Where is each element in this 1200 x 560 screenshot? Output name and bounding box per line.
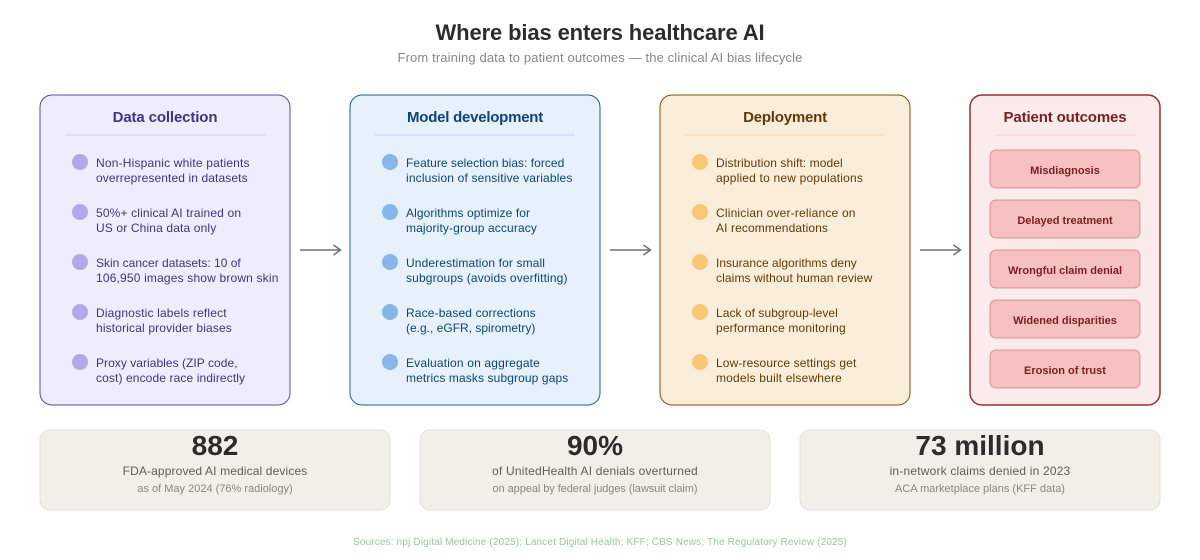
stat card: 73 million: in-network claims denied in 2023 bbox=[890, 464, 1070, 478]
heading: patient outcomes: Patient outcomes bbox=[1004, 109, 1126, 126]
item: lack of monitoring bbox=[692, 304, 846, 335]
item: proxy variables: cost) encode race indirectly bbox=[96, 371, 245, 385]
item: underestimation: Underestimation for small bbox=[406, 256, 545, 270]
stat card: 882 bbox=[40, 430, 390, 510]
item: distribution shift: Distribution shift: model bbox=[716, 156, 843, 170]
item: clinician over-reliance: AI recommendations bbox=[716, 221, 828, 235]
item: underestimation bbox=[382, 254, 568, 285]
panel: deployment bbox=[660, 94, 910, 406]
item: lack of monitoring: performance monitoring bbox=[716, 321, 846, 335]
item: feature selection bias: Feature selection bias: forced bbox=[406, 156, 564, 170]
panel: patient outcomes bbox=[969, 94, 1161, 406]
arrow: data collection to model development bbox=[300, 244, 342, 256]
item: algorithms optimize: majority-group accuracy bbox=[406, 221, 537, 235]
outcome: erosion of trust bbox=[990, 350, 1140, 388]
item: insurance algorithms: Insurance algorithms deny bbox=[716, 256, 857, 270]
stat card: 882: 882 bbox=[192, 430, 238, 461]
outcome: widened disparities bbox=[990, 300, 1140, 338]
outcome: delayed treatment: Delayed treatment bbox=[1017, 215, 1113, 227]
item: proxy variables bbox=[72, 354, 245, 385]
heading: deployment: Deployment bbox=[743, 109, 827, 126]
item: non-hispanic white patients: overrepresented in datasets bbox=[96, 171, 248, 185]
item: diagnostic labels bbox=[72, 304, 232, 335]
item: distribution shift bbox=[692, 154, 863, 185]
item: underestimation: subgroups (avoids overfitting) bbox=[406, 271, 568, 285]
stat card: 90%: on appeal by federal judges (lawsuit claim) bbox=[493, 483, 697, 495]
item: non-hispanic white patients: Non-Hispanic white patients bbox=[96, 156, 250, 170]
outcome: misdiagnosis bbox=[990, 150, 1140, 188]
item: insurance algorithms: claims without human review bbox=[716, 271, 872, 285]
stat card: 882: as of May 2024 (76% radiology) bbox=[137, 483, 293, 495]
item: race-based corrections: (e.g., eGFR, spirometry) bbox=[406, 321, 535, 335]
stat card: 90% bbox=[420, 430, 770, 510]
heading: data collection: Data collection bbox=[113, 109, 217, 126]
item: evaluation on aggregate metrics: Evaluation on aggregate bbox=[406, 356, 540, 370]
item: proxy variables: Proxy variables (ZIP code, bbox=[96, 356, 238, 370]
item: evaluation on aggregate metrics bbox=[382, 354, 568, 385]
item: low-resource settings: Low-resource settings get bbox=[716, 356, 856, 370]
heading: model development: Model development bbox=[407, 109, 543, 126]
item: lack of monitoring: Lack of subgroup-level bbox=[716, 306, 838, 320]
item: clinician over-reliance bbox=[692, 204, 856, 235]
outcome: delayed treatment bbox=[990, 200, 1140, 238]
item: diagnostic labels: historical provider biases bbox=[96, 321, 232, 335]
title: Where bias enters healthcare AI bbox=[436, 20, 764, 45]
item: insurance algorithms bbox=[692, 254, 872, 285]
outcome: erosion of trust: Erosion of trust bbox=[1024, 365, 1106, 377]
stat card: 90%: of UnitedHealth AI denials overturned bbox=[492, 464, 698, 478]
stat card: 90%: 90% bbox=[567, 430, 623, 461]
item: feature selection bias bbox=[382, 154, 573, 185]
item: non-hispanic white patients bbox=[72, 154, 250, 185]
item: evaluation on aggregate metrics: metrics masks subgroup gaps bbox=[406, 371, 568, 385]
outcome: wrongful claim denial bbox=[990, 250, 1140, 288]
item: race-based corrections: Race-based corrections bbox=[406, 306, 536, 320]
outcome: wrongful claim denial: Wrongful claim denial bbox=[1008, 265, 1122, 277]
item: race-based corrections bbox=[382, 304, 536, 335]
item: 50%+ clinical AI bbox=[72, 204, 241, 235]
outcome: misdiagnosis: Misdiagnosis bbox=[1030, 165, 1100, 177]
item: 50%+ clinical AI: US or China data only bbox=[96, 221, 216, 235]
subtitle: From training data to patient outcomes — the clinical AI bias lifecycle bbox=[398, 50, 802, 65]
item: distribution shift: applied to new populations bbox=[716, 171, 863, 185]
item: low-resource settings bbox=[692, 354, 856, 385]
item: 50%+ clinical AI: 50%+ clinical AI trained on bbox=[96, 206, 241, 220]
stat card: 73 million: ACA marketplace plans (KFF data) bbox=[895, 483, 1065, 495]
sources: Sources: npj Digital Medicine (2025); Lancet Digital Health; KFF; CBS News; The Regulatory Review (2025) bbox=[353, 537, 847, 548]
outcome: widened disparities: Widened disparities bbox=[1013, 315, 1117, 327]
arrow: deployment to patient outcomes bbox=[920, 244, 962, 256]
item: diagnostic labels: Diagnostic labels reflect bbox=[96, 306, 227, 320]
panel: data collection bbox=[40, 94, 290, 406]
stat card: 882: FDA-approved AI medical devices bbox=[123, 464, 307, 478]
item: skin cancer datasets: Skin cancer datasets: 10 of bbox=[96, 256, 241, 270]
arrow: model development to deployment bbox=[610, 244, 652, 256]
item: skin cancer datasets bbox=[72, 254, 279, 285]
item: feature selection bias: inclusion of sensitive variables bbox=[406, 171, 573, 185]
item: algorithms optimize bbox=[382, 204, 537, 235]
stat card: 73 million: 73 million bbox=[915, 430, 1045, 461]
item: skin cancer datasets: 106,950 images show brown skin bbox=[96, 271, 279, 285]
item: algorithms optimize: Algorithms optimize for bbox=[406, 206, 530, 220]
panel: model development bbox=[350, 94, 600, 406]
item: low-resource settings: models built elsewhere bbox=[716, 371, 842, 385]
item: clinician over-reliance: Clinician over-reliance on bbox=[716, 206, 856, 220]
stat card: 73 million bbox=[800, 430, 1160, 510]
